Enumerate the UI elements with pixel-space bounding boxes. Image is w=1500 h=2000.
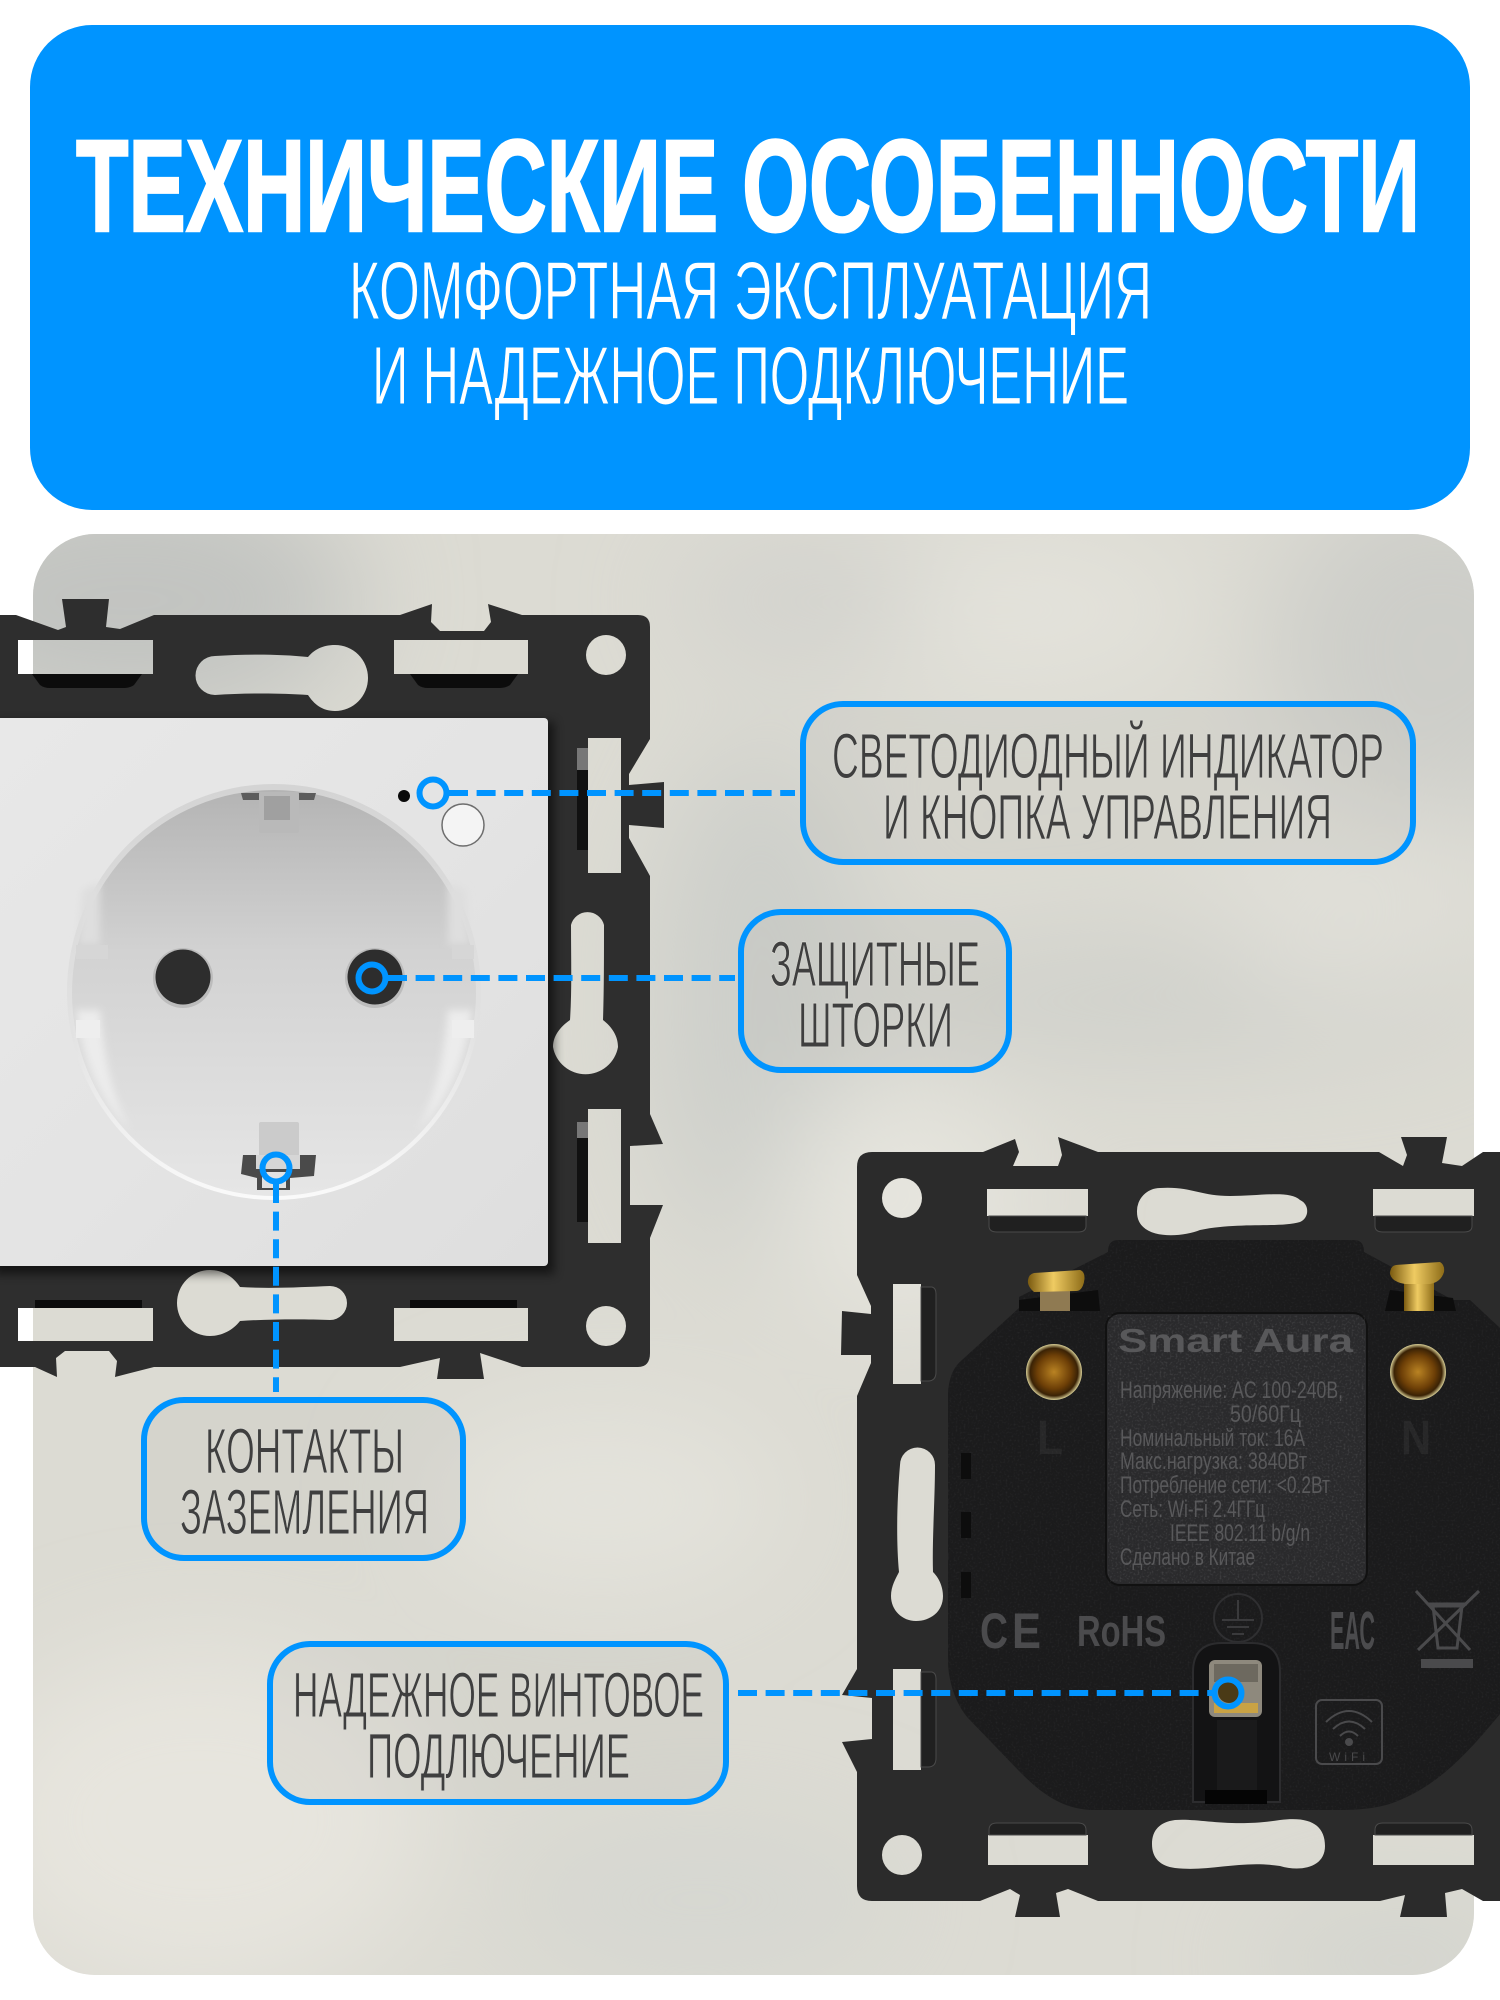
connector line xyxy=(388,975,735,981)
socket pin holes xyxy=(153,948,405,1008)
label box xyxy=(803,704,1413,862)
marker ring xyxy=(420,780,446,806)
spec text: Сеть: Wi-Fi 2.4ГГц xyxy=(1120,1496,1265,1523)
slot shadows xyxy=(32,674,588,1308)
label text: ШТОРКИ xyxy=(798,989,953,1061)
label text xyxy=(770,928,980,1061)
socket rear view: ЕАС xyxy=(1330,1601,1375,1661)
marker ring xyxy=(1214,1680,1242,1706)
brand name: Smart Aura xyxy=(1118,1322,1354,1359)
label text xyxy=(832,719,1384,853)
spec text: IEEE 802.11 b/g/n xyxy=(1170,1520,1310,1547)
callout: LED indicator and button xyxy=(420,704,1413,862)
CE mark: E xyxy=(1012,1603,1041,1659)
spec text: Потребление сети: <0.2Вт xyxy=(1120,1472,1330,1499)
socket faceplate xyxy=(0,718,548,1266)
spec plate xyxy=(1106,1313,1367,1585)
label box xyxy=(270,1644,726,1802)
spec text xyxy=(1120,1377,1343,1571)
socket rear view xyxy=(841,1137,1500,1917)
terminal N screw xyxy=(1385,1262,1456,1311)
connector line xyxy=(449,790,795,796)
bottom ground contact xyxy=(241,1122,316,1190)
ground terminal channel xyxy=(1193,1643,1280,1804)
top ground contact xyxy=(241,792,316,833)
rear housing xyxy=(948,1240,1500,1810)
socket recess xyxy=(67,784,481,1200)
spec text: Сделано в Китае xyxy=(1120,1544,1255,1571)
icon: WEEE crossed bin xyxy=(1416,1591,1479,1668)
label text: ЗАЩИТНЫЕ xyxy=(770,928,980,1000)
label text: КОНТАКТЫ xyxy=(205,1415,404,1487)
terminal label N: N xyxy=(1401,1412,1431,1465)
connector line xyxy=(738,1690,1213,1696)
spec text: Напряжение: AC 100-240В, xyxy=(1120,1377,1343,1404)
header banner xyxy=(30,25,1470,510)
RoHS mark: RoHS xyxy=(1077,1607,1166,1656)
CE mark: C xyxy=(980,1603,1008,1659)
control button xyxy=(442,804,484,846)
connector line xyxy=(273,1184,279,1392)
icon: earth symbol xyxy=(1214,1594,1262,1642)
CE mark xyxy=(980,1603,1041,1659)
mounting frame: front xyxy=(0,599,664,1379)
terminal L hole xyxy=(1026,1344,1082,1400)
callout: screw connection xyxy=(270,1644,1242,1802)
subtitle xyxy=(349,244,1152,422)
panel: product background xyxy=(0,470,1500,2000)
icon: wifi badge: WiFi xyxy=(1329,1750,1369,1764)
terminal label L: L xyxy=(1037,1412,1063,1465)
label text: ПОДЛЮЧЕНИЕ xyxy=(367,1720,630,1792)
frame slot details xyxy=(921,1216,1472,1835)
label text xyxy=(293,1659,704,1792)
label text: ЗАЗЕМЛЕНИЯ xyxy=(180,1476,429,1548)
indicator LED xyxy=(398,790,410,802)
terminal N hole xyxy=(1390,1344,1446,1400)
icon: wifi badge xyxy=(1316,1700,1382,1764)
label box xyxy=(741,912,1009,1070)
housing texture xyxy=(940,1240,1500,1815)
callout: grounding contacts xyxy=(144,1154,463,1558)
spec text: Макс.нагрузка: 3840Вт xyxy=(1120,1448,1307,1475)
label box xyxy=(144,1400,463,1558)
terminal L screw xyxy=(1019,1270,1100,1311)
label text: НАДЕЖНОЕ ВИНТОВОЕ xyxy=(293,1659,704,1731)
marker ring xyxy=(358,964,386,992)
socket front view xyxy=(0,599,664,1379)
marker ring xyxy=(262,1154,290,1182)
callout: protective shutters xyxy=(358,912,1009,1070)
label text xyxy=(180,1415,429,1548)
housing clips xyxy=(961,1453,971,1598)
mounting frame: rear xyxy=(841,1137,1500,1917)
spec text: 50/60Гц xyxy=(1230,1401,1301,1428)
socket faceplate shadow xyxy=(0,722,554,1274)
spec text: Номинальный ток: 16А xyxy=(1120,1425,1305,1452)
